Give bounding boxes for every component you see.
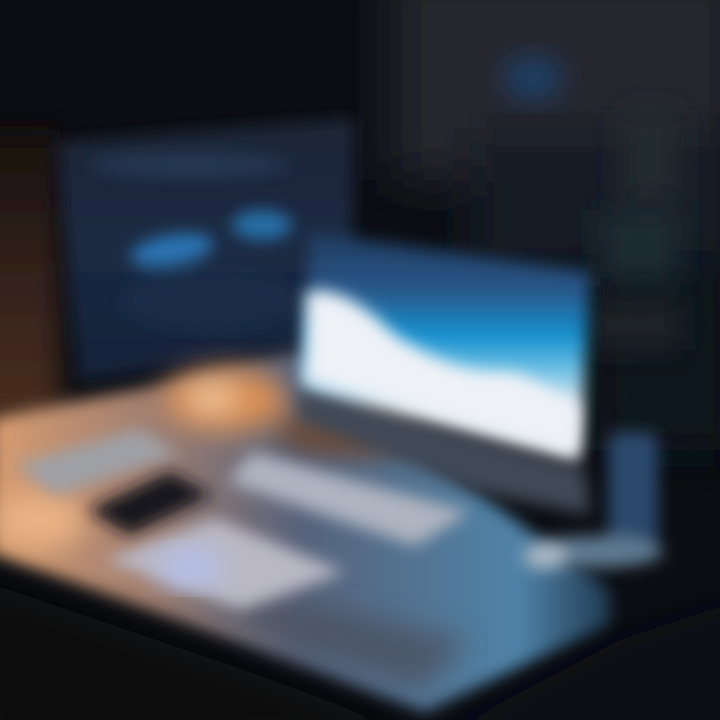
monitor base shadow — [300, 385, 590, 515]
screen wave: white chart area — [305, 291, 578, 452]
left tablet — [15, 428, 180, 495]
background blue glow — [503, 56, 563, 100]
pad tint — [158, 550, 222, 586]
left wall: warm brown — [0, 130, 60, 420]
upper right backdrop — [390, 0, 720, 450]
monitor screen — [303, 232, 590, 462]
right column: faint shelves — [590, 110, 680, 350]
right device: stand and base — [523, 432, 663, 570]
back panel: secondary display — [58, 118, 355, 382]
desk lower shadow — [0, 580, 420, 720]
desk surface — [0, 350, 610, 712]
desk warm glow — [0, 368, 415, 548]
keyboard — [228, 452, 470, 546]
dark device on desk — [88, 472, 212, 535]
lower right shadow — [440, 600, 720, 720]
desk lower gray band — [180, 590, 470, 690]
mouse pad — [105, 518, 345, 610]
back panel chart blobs — [90, 153, 300, 330]
